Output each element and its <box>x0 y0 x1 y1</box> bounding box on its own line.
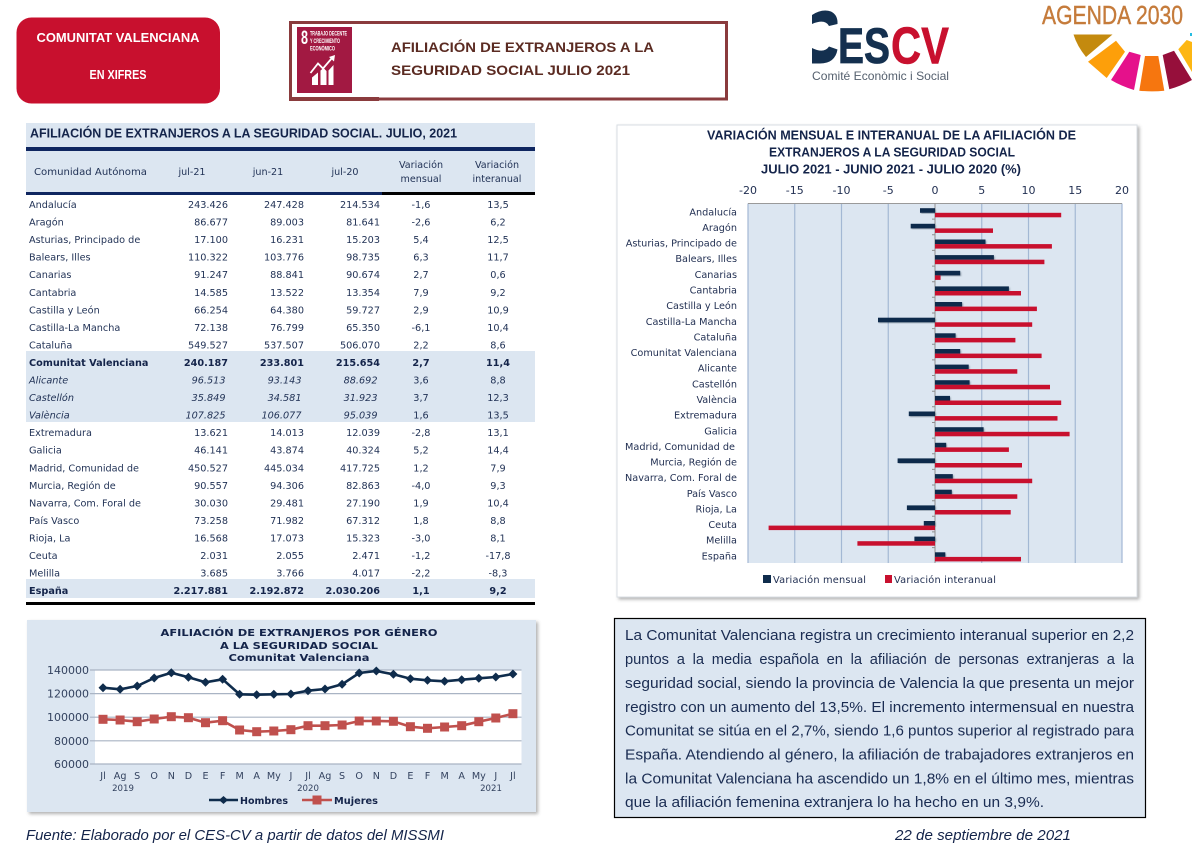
table rows: 2.030.206 <box>325 586 380 597</box>
x axis labels: E <box>202 771 209 782</box>
table rows: 30.030 <box>194 498 228 509</box>
table rows: 6,3 <box>413 253 429 264</box>
table header: mensual <box>401 174 441 185</box>
x axis labels: E <box>407 771 413 782</box>
table rows: 91.247 <box>194 270 228 281</box>
table rows: 71.982 <box>270 516 304 527</box>
text block: commentary: Comunitat se sitúa en el 2,7%, siendo 1,6 puntos superior al registrado para <box>625 724 1134 740</box>
table header: Comunidad Autónoma <box>34 166 147 178</box>
table rows: 2,7 <box>412 358 430 369</box>
table rows: 3.685 <box>200 569 228 580</box>
table rows: -8,3 <box>489 569 507 580</box>
bars and region labels: Navarra, Com. Foral de <box>625 473 737 484</box>
table rows: 98.735 <box>346 253 380 264</box>
icon: SDG 8 decent work: 8 <box>301 28 308 49</box>
table rows: 35.849 <box>192 393 226 404</box>
y axis labels <box>47 664 89 771</box>
table rows: 2.192.872 <box>249 586 304 597</box>
table rows: 10,9 <box>487 305 509 316</box>
table rows: 96.513 <box>192 376 226 386</box>
chart title <box>707 128 1076 176</box>
table rows: 110.322 <box>188 253 228 264</box>
table rows: 2.471 <box>352 551 380 562</box>
table rows: 15.323 <box>346 534 380 544</box>
logo: CES-CV: ES <box>838 18 890 74</box>
chart title: A LA SEGURIDAD SOCIAL <box>220 641 379 652</box>
table rows: -1,2 <box>412 551 430 562</box>
table rows: Canarias <box>29 270 71 281</box>
x axis labels: S <box>339 771 345 782</box>
table rows: -6,1 <box>412 323 430 334</box>
date: 22 de septiembre de 2021 <box>894 828 1071 844</box>
chart title: AFILIACIÓN DE EXTRANJEROS POR GÉNERO <box>160 626 438 639</box>
chart title: VARIACIÓN MENSUAL E INTERANUAL DE LA AFILIACIÓN DE <box>707 128 1076 142</box>
table rows: 9,3 <box>490 481 506 492</box>
year labels: 2020 <box>297 784 319 794</box>
table rows: 445.034 <box>264 463 304 474</box>
table rows: -2,2 <box>412 569 430 580</box>
axis values: -15 <box>786 184 804 197</box>
series: Mujeres <box>103 714 513 732</box>
table rows: 27.190 <box>346 498 380 509</box>
table rows: 12,3 <box>487 393 509 404</box>
logo: CES-CV <box>812 11 949 83</box>
table rows: 15.203 <box>346 235 380 246</box>
table rows: 3,7 <box>413 393 429 404</box>
table rows: Castilla y León <box>29 304 100 316</box>
table rows: País Vasco <box>29 515 79 527</box>
bars and region labels: País Vasco <box>687 488 737 500</box>
axis values: -20 <box>739 184 757 197</box>
bars and region labels: Cantabria <box>690 286 737 297</box>
table rows: 12.039 <box>346 428 380 439</box>
axis values: -10 <box>833 184 850 197</box>
x axis labels: A <box>253 771 260 782</box>
x axis labels: Jl <box>99 771 106 782</box>
table rows: 82.863 <box>346 481 380 492</box>
table rows: Andalucía <box>29 199 77 211</box>
table header: interanual <box>473 174 521 185</box>
chart title: EXTRANJEROS A LA SEGURIDAD SOCIAL <box>769 146 1015 160</box>
table rows: 94.306 <box>270 481 304 492</box>
table rows: Ceuta <box>29 551 58 562</box>
axis values: 0 <box>932 184 938 197</box>
table rows: 13,5 <box>487 200 509 211</box>
table rows: 8,8 <box>490 516 506 527</box>
table rows: Castellón <box>29 392 74 404</box>
table rows: 86.677 <box>194 218 228 229</box>
table rows: 11,4 <box>486 358 510 369</box>
table rows: 64.380 <box>270 305 304 316</box>
table rows: 88.692 <box>344 376 378 386</box>
table rows: 40.324 <box>346 446 380 457</box>
x axis labels: F <box>220 771 225 782</box>
table rows: 10,4 <box>487 498 509 509</box>
table rows: 1,9 <box>413 498 429 509</box>
y axis labels: 60000 <box>54 758 89 771</box>
x axis labels: O <box>150 771 158 782</box>
table rows: -4,0 <box>412 481 430 492</box>
panel: data table <box>26 123 535 605</box>
bars and region labels: Balears, Illes <box>675 254 737 265</box>
table rows: 14.585 <box>194 288 228 299</box>
table header <box>34 159 521 185</box>
x axis labels: M <box>440 771 449 782</box>
table rows: España <box>29 586 68 597</box>
table rows: Balears, Illes <box>29 253 91 264</box>
x axis labels: Jl <box>304 771 311 782</box>
year labels <box>112 784 502 794</box>
table rows: 13,1 <box>487 428 509 439</box>
badge: Comunitat Valenciana en xifres <box>16 18 220 104</box>
bars and region labels <box>625 206 1070 562</box>
table rows <box>28 199 511 597</box>
year labels: 2021 <box>480 784 502 794</box>
table rows: 233.801 <box>260 358 304 369</box>
bars and region labels: Rioja, La <box>696 505 737 516</box>
table rows: -3,0 <box>412 534 430 544</box>
table rows: 43.874 <box>270 446 304 457</box>
bars and region labels: Melilla <box>706 536 737 547</box>
bars and region labels: Murcia, Región de <box>650 457 737 469</box>
axis values: 10 <box>1022 184 1036 197</box>
table rows: 14.013 <box>270 428 304 439</box>
bars and region labels: Cataluña <box>694 332 737 343</box>
x axis labels: Ag <box>114 771 126 782</box>
table rows: 9,2 <box>489 586 507 597</box>
table rows: Cataluña <box>29 340 72 351</box>
table rows: 214.534 <box>340 200 380 211</box>
table rows: 8,6 <box>490 340 506 351</box>
table rows: 89.003 <box>270 218 304 229</box>
table rows: 72.138 <box>194 323 228 334</box>
panel: affiliation by gender line chart <box>27 620 536 812</box>
bars and region labels: Extremadura <box>674 411 737 422</box>
heading: AFILIACIÓN DE EXTRANJEROS A LA <box>391 38 654 55</box>
table title: AFILIACIÓN DE EXTRANJEROS A LA SEGURIDAD SOCIAL. JULIO, 2021 <box>30 126 457 140</box>
table rows: 2,7 <box>413 270 429 281</box>
bars and region labels: Galicia <box>704 426 737 437</box>
table rows: 243.426 <box>188 200 228 211</box>
x axis labels: O <box>355 771 363 782</box>
bars and region labels: València <box>696 394 737 406</box>
table rows: 95.039 <box>344 411 378 422</box>
table rows: 90.557 <box>194 481 228 492</box>
heading: SEGURIDAD SOCIAL JULIO 2021 <box>391 62 630 78</box>
table rows: 93.143 <box>268 376 302 386</box>
table rows: València <box>29 410 70 422</box>
x axis labels: Ag <box>319 771 331 782</box>
table rows: 450.527 <box>188 463 228 474</box>
table rows: Melilla <box>29 569 60 580</box>
table rows: 29.481 <box>270 498 304 509</box>
icon: SDG 8 decent work: Y CRECIMIENTO <box>310 38 340 45</box>
table rows: 7,9 <box>413 288 429 299</box>
table rows: 13,5 <box>487 411 509 422</box>
bars and region labels: Castellón <box>692 378 737 390</box>
table rows: Comunitat Valenciana <box>29 358 148 369</box>
x axis labels: N <box>373 771 380 782</box>
table rows: 34.581 <box>268 393 302 404</box>
table rows: 215.654 <box>336 358 380 369</box>
table rows: 7,9 <box>490 463 506 474</box>
x axis labels: N <box>168 771 175 782</box>
table rows: Murcia, Región de <box>29 480 116 492</box>
text block: commentary: registro con un aumento del 13,5%. El incremento intermensual en nuestra <box>625 700 1134 716</box>
table rows: 2,9 <box>413 305 429 316</box>
y axis labels: 80000 <box>54 735 89 748</box>
table rows: 2,2 <box>413 340 429 351</box>
y axis labels: 100000 <box>47 711 89 724</box>
table rows: Castilla-La Mancha <box>29 323 120 334</box>
plot area <box>90 670 522 764</box>
bars and region labels: Aragón <box>702 222 737 234</box>
axis values: 20 <box>1115 184 1129 197</box>
legend: Variación mensual <box>773 574 866 586</box>
text block: commentary: que la afiliación femenina extranjera lo ha hecho en un 3,9%. <box>625 795 1044 811</box>
table rows: 240.187 <box>184 358 228 369</box>
table rows: 106.077 <box>261 411 302 422</box>
table rows: 16.568 <box>194 534 228 544</box>
table header: Variación <box>399 159 443 171</box>
title box <box>289 22 726 101</box>
table rows: 1,8 <box>413 516 429 527</box>
table rows: 81.641 <box>346 218 380 229</box>
table rows: 0,6 <box>490 270 506 281</box>
table rows: -2,8 <box>412 428 430 439</box>
icon: SDG 8 decent work <box>297 27 352 93</box>
table rows: Madrid, Comunidad de <box>29 463 139 474</box>
table rows: 66.254 <box>194 305 228 316</box>
bars and region labels: Madrid, Comunidad de <box>625 442 735 453</box>
table rows: 13.354 <box>346 288 380 299</box>
table header: jun-21 <box>252 167 283 178</box>
x axis labels: F <box>425 771 430 782</box>
y axis labels: 140000 <box>47 664 89 677</box>
chart title: JULIO 2021 - JUNIO 2021 - JULIO 2020 (%) <box>761 162 1021 176</box>
axis values <box>739 184 1129 197</box>
table rows: 8,1 <box>490 534 506 544</box>
bars and region labels: Asturias, Principado de <box>626 239 737 250</box>
bars and region labels: Canarias <box>695 270 737 281</box>
table rows: 247.428 <box>264 200 304 211</box>
table rows: 10,4 <box>487 323 509 334</box>
legend: Mujeres <box>334 796 378 807</box>
text block: commentary <box>614 618 1146 818</box>
x axis labels: D <box>390 771 397 782</box>
x axis labels: M <box>235 771 244 782</box>
series: Hombres <box>103 671 513 695</box>
bars and region labels: Ceuta <box>708 520 737 531</box>
axis values: -5 <box>883 184 894 197</box>
bars and region labels: España <box>702 551 737 562</box>
logo: CES-CV: Comité Econòmic i Social <box>812 69 949 83</box>
table rows: 1,6 <box>413 411 429 422</box>
table rows: 76.799 <box>270 323 304 334</box>
table rows: 3,6 <box>413 376 429 386</box>
table rows: 537.507 <box>264 340 304 351</box>
table rows: 59.727 <box>346 305 380 316</box>
heading <box>391 38 654 78</box>
table rows: 17.073 <box>270 534 304 544</box>
x axis labels: D <box>185 771 192 782</box>
table rows: 11,7 <box>487 253 509 264</box>
legend <box>763 574 996 586</box>
text block: commentary: puntos a la media española en la afiliación de personas extranjeras a la <box>625 652 1134 668</box>
table rows: 1,1 <box>412 586 430 597</box>
source note: Fuente: Elaborado por el CES-CV a partir de datos del MISSMI <box>26 828 444 844</box>
y axis labels: 120000 <box>47 688 89 701</box>
logo: Agenda 2030 <box>1042 0 1192 91</box>
table rows: 417.725 <box>340 463 380 474</box>
table rows: 2.031 <box>200 551 228 562</box>
table rows: 5,2 <box>413 446 429 457</box>
icon: SDG 8 decent work: ECONÓMICO <box>310 44 335 52</box>
panel: monthly and yearly variation bar chart <box>617 125 1137 597</box>
table rows: 103.776 <box>264 253 304 264</box>
legend <box>209 796 378 807</box>
table rows: 3.766 <box>276 569 304 580</box>
table rows: 17.100 <box>194 235 228 246</box>
axis values: 5 <box>978 184 985 197</box>
table rows: 46.141 <box>194 446 228 457</box>
table rows: 107.825 <box>185 411 226 422</box>
table rows: Cantabria <box>29 288 76 299</box>
table rows: 88.841 <box>270 270 304 281</box>
table rows: Aragón <box>29 217 64 229</box>
year labels: 2019 <box>112 784 134 794</box>
x axis labels: J <box>288 771 292 782</box>
table rows: 13.621 <box>194 428 228 439</box>
table header: jul-20 <box>330 167 359 178</box>
bars and region labels: Castilla y León <box>666 300 737 312</box>
text block: commentary: España. Atendiendo al género, la afiliación de trabajadores extranjeros en <box>625 748 1134 764</box>
text block: commentary: seguridad social, siendo la provincia de Valencia la que presenta un mejor <box>625 676 1134 692</box>
table rows: Navarra, Com. Foral de <box>29 498 141 509</box>
logo: CES-CV: CV <box>891 18 949 76</box>
table rows: Rioja, La <box>29 534 71 544</box>
table rows: Asturias, Principado de <box>29 235 140 246</box>
table rows: 67.312 <box>346 516 380 527</box>
table rows: 4.017 <box>352 569 380 580</box>
badge: Comunitat Valenciana en xifres: EN XIFRES <box>90 68 146 82</box>
table rows: Alicante <box>28 376 68 386</box>
badge: Comunitat Valenciana en xifres: COMUNITAT VALENCIANA <box>36 30 200 45</box>
table rows: 6,2 <box>490 218 506 229</box>
table header: jul-21 <box>177 167 206 178</box>
table rows: 8,8 <box>490 376 506 386</box>
table rows: Galicia <box>29 446 62 457</box>
table header: Variación <box>475 159 519 171</box>
legend: Hombres <box>240 796 288 807</box>
x axis labels: A <box>458 771 465 782</box>
x axis labels: Jl <box>509 771 516 782</box>
icon: SDG 8 decent work: TRABAJO DECENTE <box>310 30 347 38</box>
table rows: -2,6 <box>412 218 430 229</box>
table rows: 65.350 <box>346 323 380 334</box>
table rows: 14,4 <box>487 446 509 457</box>
table rows: 9,2 <box>490 288 506 299</box>
chart title: Comunitat Valenciana <box>228 653 370 664</box>
x axis labels: My <box>472 771 486 782</box>
table rows: 16.231 <box>270 235 304 246</box>
table rows: 1,2 <box>413 463 429 474</box>
bars and region labels: Andalucía <box>689 206 737 218</box>
table rows: Extremadura <box>29 428 92 439</box>
legend: Variación interanual <box>894 574 996 586</box>
table rows: 13.522 <box>270 288 304 299</box>
chart title <box>160 626 438 664</box>
x axis labels: S <box>134 771 140 782</box>
axis values: 15 <box>1068 184 1082 197</box>
bars and region labels: Alicante <box>698 364 737 375</box>
bars and region labels: Comunitat Valenciana <box>631 348 737 359</box>
table rows: 90.674 <box>346 270 380 281</box>
x axis labels: My <box>267 771 281 782</box>
text block: commentary: La Comunitat Valenciana registra un crecimiento interanual superior en 2,2 <box>625 628 1134 644</box>
table rows: 2.055 <box>276 551 304 562</box>
table rows: 12,5 <box>487 235 509 246</box>
table rows: 31.923 <box>344 393 378 404</box>
bars and region labels: Castilla-La Mancha <box>646 317 737 328</box>
text block: commentary: la Comunitat Valenciana ha ascendido un 1,8% en el último mes, mientras <box>625 772 1134 788</box>
plot background <box>748 204 1122 563</box>
table rows: 549.527 <box>188 340 228 351</box>
table rows: -1,6 <box>412 200 430 211</box>
table rows: 2.217.881 <box>173 586 228 597</box>
x axis labels <box>99 771 516 782</box>
x axis labels: J <box>493 771 497 782</box>
table rows: 5,4 <box>413 235 429 246</box>
table rows: 506.070 <box>340 340 380 351</box>
table rows: -17,8 <box>485 551 511 562</box>
table rows: 73.258 <box>194 516 228 527</box>
